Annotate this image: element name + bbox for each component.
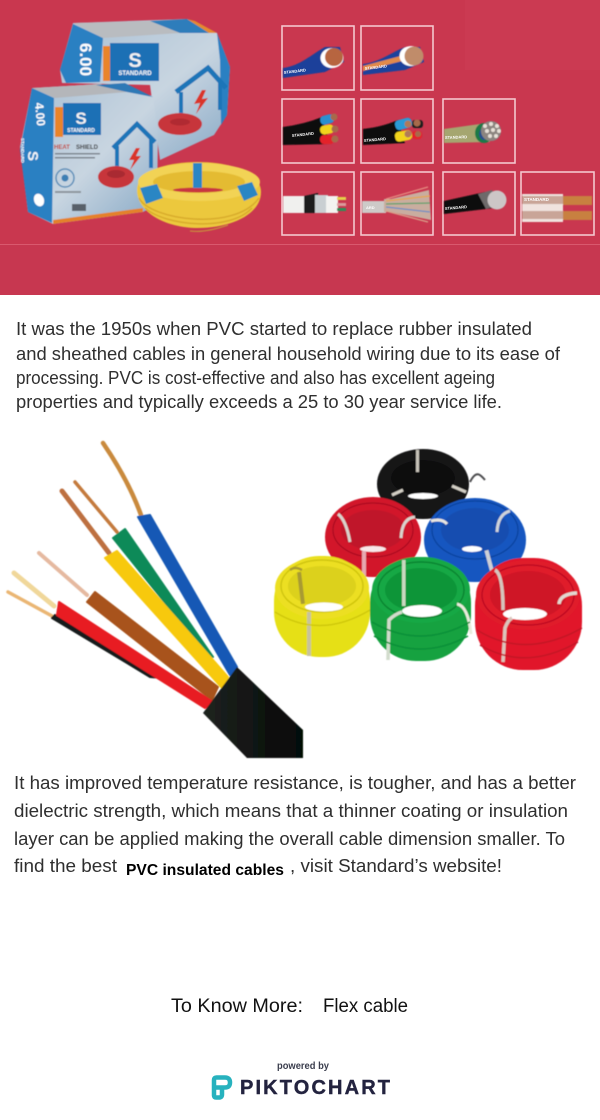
box: 4.00 front carton (20, 83, 158, 224)
box: 6.00 back carton (60, 19, 230, 160)
tile: four core black (361, 99, 433, 163)
text block: PVC history: properties and typically exceeds a 25 to 30 year service life. (16, 392, 502, 412)
footer: powered by Piktochart: powered by (277, 1060, 329, 1072)
box: 4.00 front carton: HEAT (54, 145, 70, 151)
coil: black (377, 449, 485, 519)
tile: black aerial cable (443, 172, 515, 235)
tile: data cable: ARD (366, 205, 375, 210)
text block: PVC history: processing. PVC is cost-effective and also has excellent ageing (16, 368, 495, 388)
call to action: to know more: To Know More: (171, 996, 303, 1017)
box: 4.00 front carton: 4.00 (32, 102, 48, 127)
text block: PVC benefits: layer can be applied making the overall cable dimension smaller. To (14, 829, 565, 849)
text block: PVC benefits: dielectric strength, which means that a thinner coating or insulation (14, 801, 568, 821)
insulated cores (52, 515, 237, 708)
tile: orange and blue core: STANDARD (365, 63, 387, 71)
box: 6.00 back carton: S (128, 50, 142, 72)
coil: green (370, 557, 471, 661)
illustration: coloured wire coils (274, 449, 582, 670)
tile: flat twin cable: STANDARD (524, 197, 550, 202)
footer: powered by Piktochart: PIKTOCHART (240, 1077, 390, 1099)
tile: black aerial cable: STANDARD (445, 204, 467, 211)
coil: blue (424, 498, 526, 582)
text block: PVC history: and sheathed cables in general household wiring due to its ease of (16, 344, 561, 364)
tile: armoured cable (282, 172, 354, 235)
call to action: to know more: Flex cable (323, 996, 408, 1017)
outer black sheath (203, 667, 303, 758)
tile: three core black: STANDARD (292, 131, 314, 138)
tile: blue single core: STANDARD (284, 67, 306, 75)
tile: multi-core control cable (443, 99, 515, 163)
box: 4.00 front carton: S (24, 151, 41, 161)
tile: data cable (361, 172, 433, 235)
link: PVC insulated cables: PVC insulated cables (126, 862, 284, 879)
tile: four core black: STANDARD (364, 136, 386, 143)
box: 6.00 back carton: 6.00 (76, 43, 95, 76)
panel: red banner (0, 0, 600, 295)
box: 4.00 front carton: STANDARD (20, 138, 25, 164)
coil: front red (475, 558, 582, 670)
tile: flat twin cable (521, 172, 594, 235)
tile: three core black (282, 99, 354, 163)
box: 4.00 front carton: STANDARD (67, 128, 95, 134)
illustration: cable boxes and yellow coil (20, 19, 261, 231)
icon: Piktochart logo (214, 1078, 230, 1098)
text block: PVC benefits: , visit Standard’s website! (290, 856, 502, 876)
box: 4.00 front carton: SHIELD (76, 145, 99, 151)
icon: yellow wire coil (137, 162, 261, 231)
text block: PVC benefits: find the best (14, 856, 117, 876)
text block: PVC history: It was the 1950s when PVC started to replace rubber insulated (16, 319, 532, 339)
footer: powered by Piktochart (214, 1060, 390, 1099)
text block: PVC benefits: It has improved temperature resistance, is tougher, and has a better (14, 773, 576, 793)
tile: multi-core control cable: STANDARD (445, 134, 467, 140)
coil: yellow (274, 556, 370, 657)
text block: PVC benefits (14, 773, 576, 879)
box: 4.00 front carton: S (75, 109, 87, 128)
exposed copper strands (8, 443, 141, 616)
coil: back red (325, 497, 421, 577)
text block: PVC history (16, 319, 561, 412)
tile: blue single core (282, 26, 354, 90)
illustration: multi-core flex cable (8, 443, 303, 758)
tile: orange and blue core (361, 26, 433, 90)
call to action: to know more (171, 996, 408, 1017)
box: 6.00 back carton: STANDARD (118, 71, 152, 77)
cable tiles grid (282, 26, 594, 235)
